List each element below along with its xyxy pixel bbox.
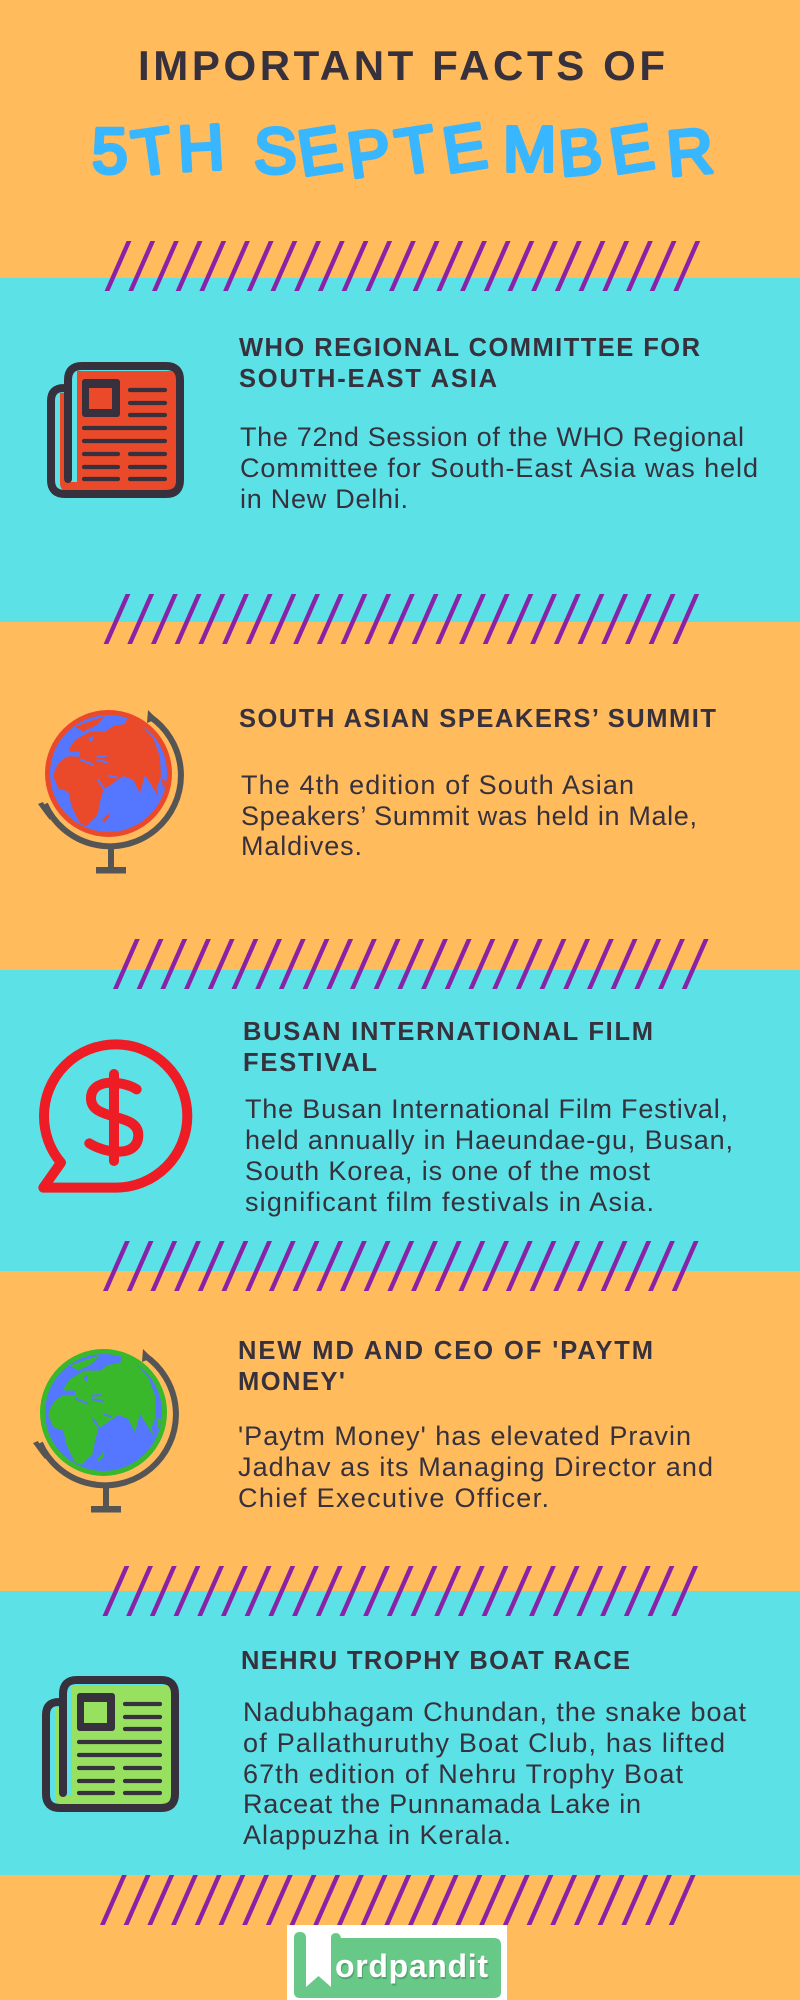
text block: WHO committee (240, 422, 758, 514)
divider stripes 2 (104, 594, 699, 644)
divider stripes 5 (102, 1566, 698, 1616)
heading: Paytm Money (238, 1337, 653, 1396)
heading: WHO committee: WHO REGIONAL COMMITTEE FOR (239, 334, 700, 362)
text block: Paytm Money: Jadhav as its Managing Director and (238, 1452, 713, 1482)
text block: Nehru Trophy (243, 1697, 746, 1850)
text block: Nehru Trophy: Raceat the Punnamada Lake in (243, 1789, 641, 1819)
heading: Busan festival (243, 1018, 653, 1077)
title date: 5TH SEPTEMBER (92, 109, 716, 192)
icon: green newspaper (46, 1680, 175, 1808)
logo: Wordpandit: ordpandit (335, 1948, 488, 1984)
text block: Busan festival: held annually in Haeundae-gu, Busan, (245, 1125, 733, 1155)
heading: South Asian summit: SOUTH ASIAN SPEAKERS’ SUMMIT (239, 705, 716, 733)
text block: South Asian summit: The 4th edition of South Asian (241, 770, 634, 800)
text block: Nehru Trophy: 67th edition of Nehru Trophy Boat (243, 1759, 683, 1789)
logo: Wordpandit (287, 1925, 507, 2000)
panel: WHO background (0, 278, 800, 622)
text block: Busan festival (245, 1094, 733, 1217)
heading: WHO committee: SOUTH-EAST ASIA (239, 365, 497, 393)
divider stripes 3 (113, 939, 709, 989)
divider stripes 1 (105, 241, 700, 291)
panel: Paytm background (0, 1271, 800, 1591)
text block: WHO committee: in New Delhi. (240, 484, 408, 514)
icon: red newspaper (51, 366, 180, 494)
heading: Paytm Money: MONEY' (238, 1368, 345, 1396)
text block: WHO committee: Committee for South-East Asia was held (240, 453, 758, 483)
text block: Paytm Money: 'Paytm Money' has elevated Pravin (238, 1421, 691, 1451)
icon: red globe (38, 710, 181, 874)
heading: Nehru Trophy: NEHRU TROPHY BOAT RACE (241, 1647, 630, 1675)
text block: Nehru Trophy: of Pallathuruthy Boat Club, has lifted (243, 1728, 725, 1758)
text block: Paytm Money: Chief Executive Officer. (238, 1483, 549, 1513)
icon: dollar speech bubble (43, 1044, 187, 1188)
icon: green globe (33, 1349, 176, 1512)
panel: Nehru Trophy background (0, 1591, 800, 1875)
text block: WHO committee: The 72nd Session of the WHO Regional (240, 422, 744, 452)
panel: Busan background (0, 970, 800, 1271)
panel: header background (0, 0, 800, 278)
text block: South Asian summit (241, 770, 697, 861)
text block: Busan festival: South Korea, is one of the most (245, 1156, 650, 1186)
text block: South Asian summit: Speakers’ Summit was held in Male, (241, 801, 697, 831)
text block: Paytm Money (238, 1421, 713, 1513)
divider stripes 4 (103, 1241, 699, 1291)
text block: Nehru Trophy: Nadubhagam Chundan, the snake boat (243, 1697, 746, 1727)
text block: Busan festival: significant film festivals in Asia. (245, 1187, 654, 1217)
text block: Nehru Trophy: Alappuzha in Kerala. (243, 1820, 511, 1850)
panel: footer background (0, 1875, 800, 2000)
heading: Busan festival: FESTIVAL (243, 1049, 377, 1077)
text block: South Asian summit: Maldives. (241, 831, 362, 861)
text block: Busan festival: The Busan International Film Festival, (245, 1094, 728, 1124)
heading: Busan festival: BUSAN INTERNATIONAL FILM (243, 1018, 653, 1046)
heading: WHO committee (239, 334, 700, 393)
title line: IMPORTANT FACTS OF (138, 42, 665, 89)
panel: South Asian Speakers background (0, 622, 800, 970)
heading: Paytm Money: NEW MD AND CEO OF 'PAYTM (238, 1337, 653, 1365)
divider stripes 6 (100, 1875, 696, 1925)
